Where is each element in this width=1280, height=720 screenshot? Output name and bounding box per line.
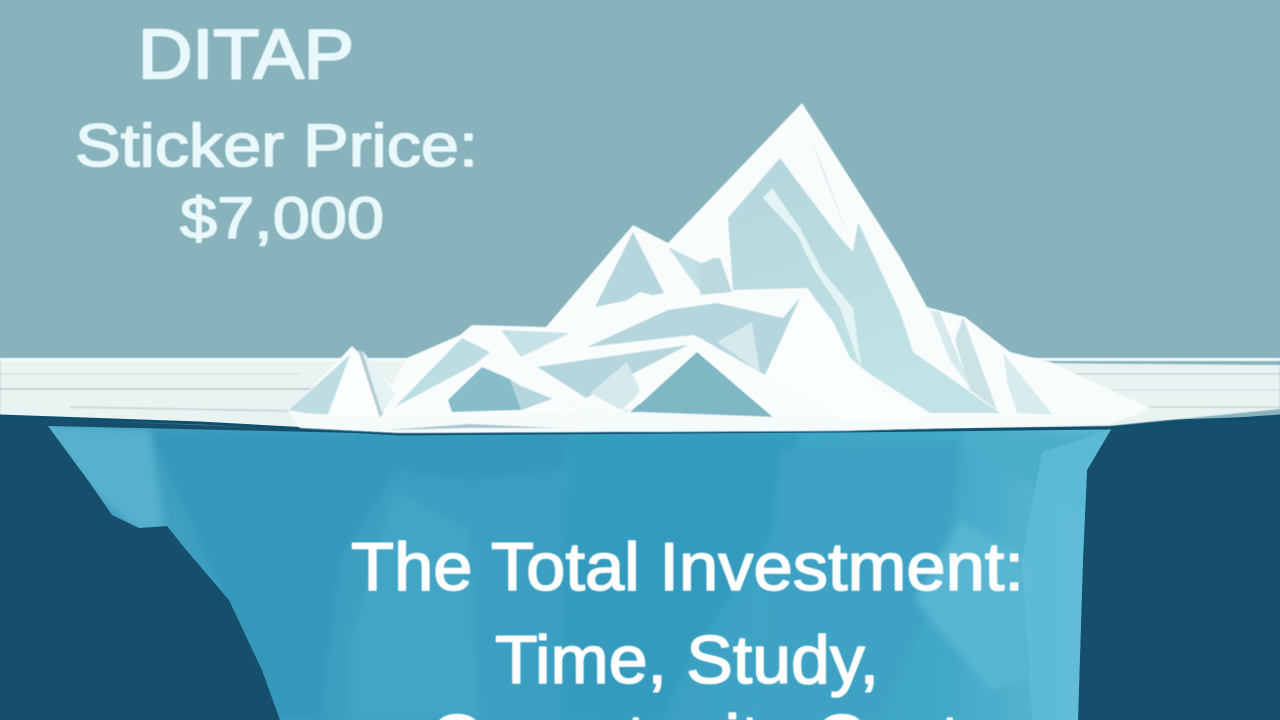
iceberg above water: [288, 103, 1150, 433]
teal triangle: [629, 352, 782, 425]
white diagonal band: [620, 338, 850, 427]
label: total investment: [351, 529, 1024, 720]
white front peak: [765, 290, 930, 424]
ice shelf at the waterline: [0, 358, 1280, 433]
shade under ridge: [587, 298, 800, 375]
label: sticker price: $7,000: [180, 186, 384, 251]
light triangle: [717, 322, 760, 373]
label: sticker price: [75, 112, 478, 251]
small left peak: [289, 353, 352, 417]
waterline edge: [0, 416, 1280, 434]
ice base: [288, 410, 1150, 433]
left ridge facets: [395, 338, 490, 407]
sky background: [0, 0, 1280, 420]
heading: DITAP: DITAP: [138, 15, 354, 93]
second peak facets: [595, 232, 664, 307]
underwater facets: [40, 425, 1110, 720]
submerged iceberg: [40, 425, 1112, 720]
foreground ridge: [529, 288, 807, 367]
deep ocean background: [0, 416, 1280, 720]
silhouette: [288, 103, 1150, 433]
main peak shaded facet: [728, 158, 1000, 413]
label: sticker price: Sticker Price:: [75, 112, 478, 179]
lower shade: [537, 345, 688, 398]
main peak white streak: [763, 188, 862, 372]
label: total investment: Time, Study,: [495, 622, 879, 698]
label: total investment: The Total Investment:: [351, 529, 1024, 605]
main peak grey sliver: [810, 135, 853, 248]
right slope facets: [955, 317, 997, 410]
